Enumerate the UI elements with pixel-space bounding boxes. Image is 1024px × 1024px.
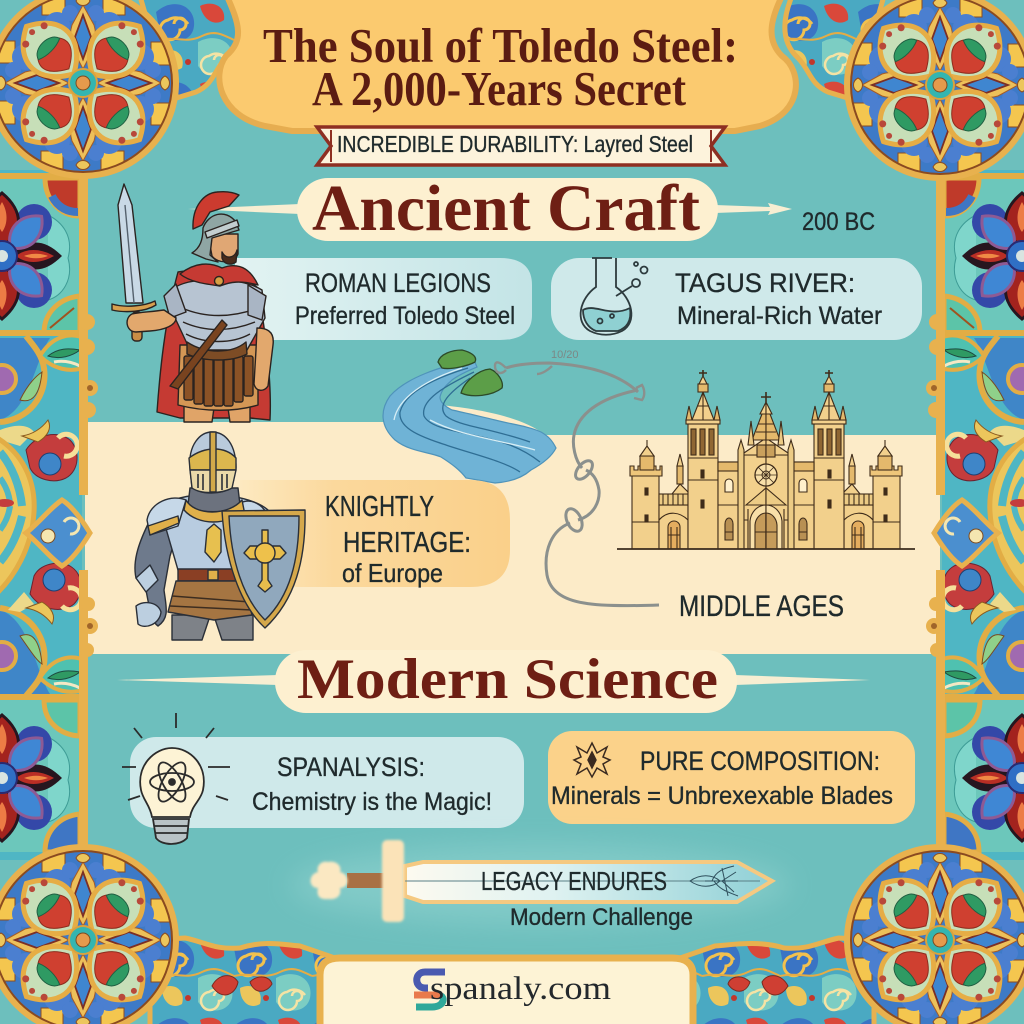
tagus heading: TAGUS RIVER: <box>675 268 855 298</box>
date label: 200 BC: 200 BC <box>802 208 875 236</box>
scabbard <box>170 320 227 389</box>
sword <box>112 184 156 341</box>
legs <box>184 405 250 422</box>
title text: A 2,000-Years Secret <box>312 61 687 116</box>
title plaque <box>219 0 796 131</box>
panel: knightly heritage <box>240 480 510 588</box>
legacy body: Modern Challenge <box>510 904 693 931</box>
torso <box>160 495 268 570</box>
composition body: Minerals = Unbrexexable Blades <box>551 782 893 810</box>
footer plaque <box>320 958 693 1024</box>
illustration: river <box>383 350 556 483</box>
crest <box>193 192 239 229</box>
medallion: bottom left <box>0 844 179 1024</box>
icon: leaves <box>690 866 738 896</box>
ribbon text: INCREDIBLE DURABILITY: Layred Steel <box>337 131 693 157</box>
panel: cream middle band <box>85 405 940 654</box>
tagus body: Mineral-Rich Water <box>677 302 882 330</box>
medallion: top left <box>0 0 179 179</box>
bottom corner arabesques <box>150 938 874 1024</box>
heading text: Ancient Craft <box>312 172 700 245</box>
left border column <box>0 170 98 860</box>
logo mark <box>414 972 445 1007</box>
knightly line three: of Europe <box>342 558 443 588</box>
helmet <box>192 214 239 262</box>
medallion: bottom right <box>844 844 1024 1024</box>
rock: upper <box>438 350 476 369</box>
roman heading: ROMAN LEGIONS <box>305 268 491 298</box>
composition heading: PURE COMPOSITION: <box>640 746 880 776</box>
mail collar <box>188 488 240 512</box>
shoulders <box>164 284 266 320</box>
helmet <box>190 432 236 493</box>
heading text: Modern Science <box>297 648 718 711</box>
panel: pure composition <box>548 731 915 824</box>
panel: spanalysis <box>122 713 524 844</box>
ribbon banner <box>317 127 725 165</box>
illustration: glowing sword <box>290 840 790 931</box>
tassets <box>168 581 252 620</box>
scribble label: 10/20 <box>551 349 579 361</box>
spanalysis heading: SPANALYSIS: <box>277 752 425 782</box>
illustration: cathedral <box>617 370 915 549</box>
icon: flask <box>581 258 648 335</box>
medallion: top right <box>844 0 1024 181</box>
knightly line two: HERITAGE: <box>343 527 471 559</box>
spanalysis body: Chemistry is the Magic! <box>252 788 492 816</box>
icon: star <box>574 743 610 777</box>
panel: tagus river <box>551 258 922 340</box>
title text: The Soul of Toledo Steel: <box>263 18 738 73</box>
lorica <box>172 280 265 350</box>
face <box>208 234 238 262</box>
legacy heading: LEGACY ENDURES <box>481 866 667 896</box>
title text <box>263 18 738 116</box>
illustration: roman soldier <box>112 184 273 422</box>
pteruges <box>184 356 253 406</box>
panel: roman legions <box>235 258 532 340</box>
heading: ancient craft <box>188 172 792 245</box>
shield <box>222 510 305 628</box>
illustration: knight <box>135 432 305 640</box>
top corner arabesques <box>140 0 884 100</box>
label: middle ages: MIDDLE AGES <box>679 590 844 623</box>
roman body: Preferred Toledo Steel <box>295 302 515 330</box>
tunic <box>178 345 258 410</box>
rock: lower <box>461 369 502 396</box>
right border column <box>926 170 1024 860</box>
icon: light bulb <box>122 713 230 844</box>
knightly line one: KNIGHTLY <box>325 491 434 523</box>
heading: modern science <box>117 648 870 713</box>
route arrow <box>495 349 659 606</box>
pauldrons <box>147 498 186 535</box>
arms <box>127 310 176 332</box>
cloak collar <box>180 264 258 286</box>
belt <box>187 342 247 360</box>
cape <box>157 271 270 420</box>
legs <box>172 610 253 640</box>
arm <box>135 520 178 626</box>
website text: spanaly.com <box>430 971 611 1007</box>
belt <box>178 569 238 581</box>
